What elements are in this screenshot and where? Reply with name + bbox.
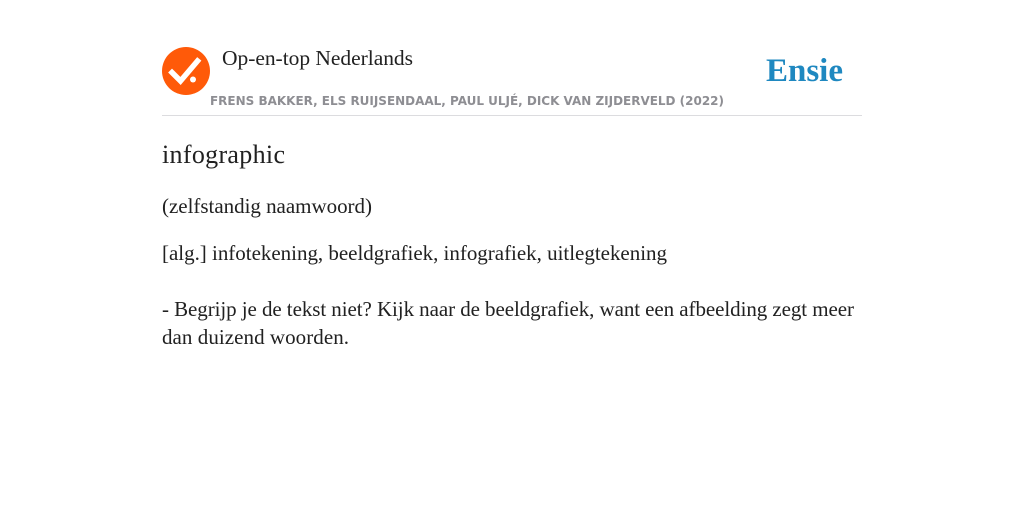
icon: orange check badge <box>162 47 210 95</box>
example sentence: dan duizend woorden. <box>162 325 349 349</box>
example sentence <box>162 297 854 349</box>
part of speech: (zelfstandig naamwoord) <box>162 194 372 218</box>
example sentence: - Begrijp je de tekst niet? Kijk naar de beeldgrafiek, want een afbeelding zegt meer <box>162 297 854 321</box>
source title: Op-en-top Nederlands <box>222 46 413 70</box>
authors line: FRENS BAKKER, ELS RUIJSENDAAL, PAUL ULJÉ, DICK VAN ZIJDERVELD (2022) <box>210 93 724 108</box>
headword: infographic <box>162 140 285 169</box>
brand logo: Ensie: Ensie <box>766 53 843 89</box>
definition: [alg.] infotekening, beeldgrafiek, infografiek, uitlegtekening <box>162 241 668 265</box>
